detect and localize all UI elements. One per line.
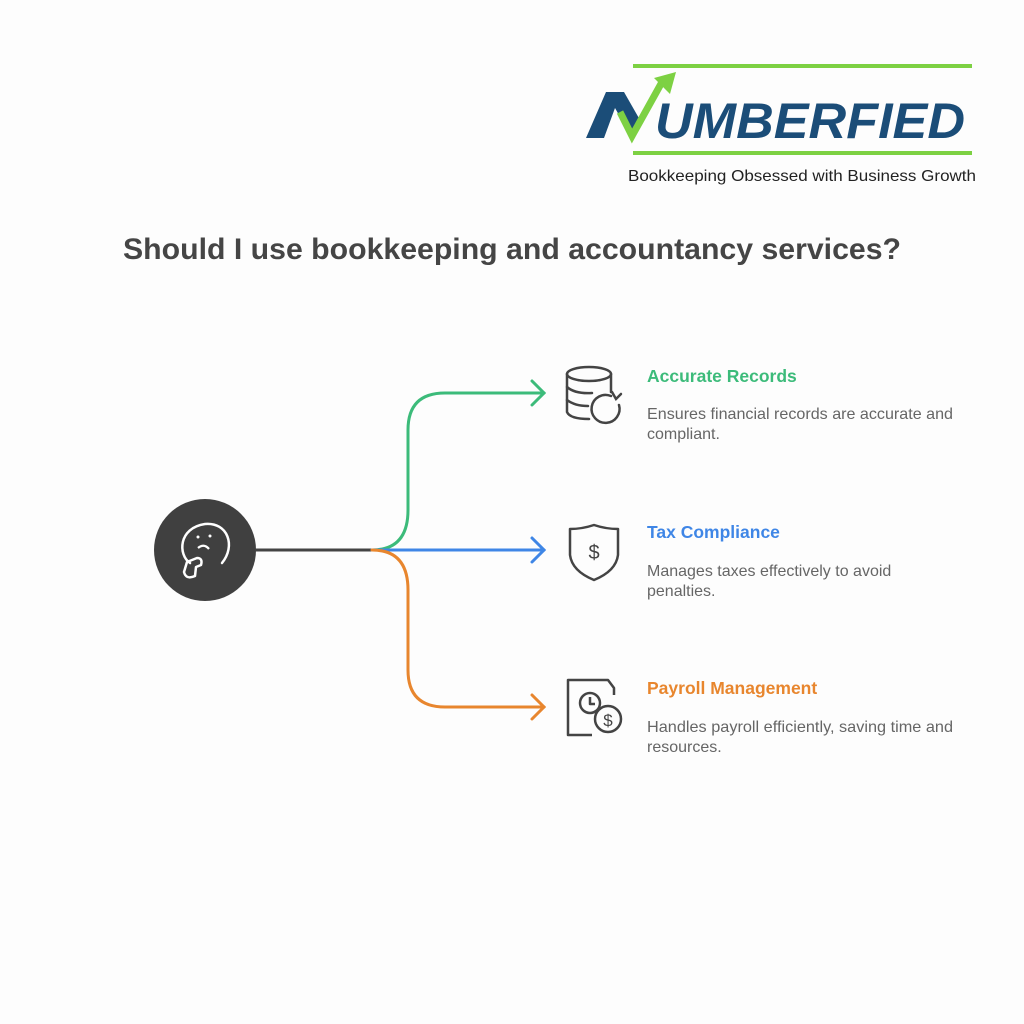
- text: payroll management: [647, 678, 953, 756]
- icon: document clock dollar: $: [603, 711, 613, 730]
- text: accurate records: compliant.: [647, 426, 720, 443]
- title: Should I use bookkeeping and accountancy services?: [123, 233, 901, 266]
- text: tax compliance: [647, 522, 891, 600]
- connector line: [255, 548, 372, 552]
- icon: shield dollar: $: [588, 542, 600, 564]
- arrow: blue: [372, 538, 544, 562]
- central thinking icon: [154, 499, 256, 601]
- text: accurate records: Accurate Records: [647, 366, 797, 386]
- icon: shield dollar: [570, 525, 618, 580]
- icon: database refresh: [567, 367, 621, 423]
- arrow: green: [372, 381, 544, 550]
- arrow: orange: [372, 550, 544, 719]
- text: payroll management: Payroll Management: [647, 678, 817, 698]
- text: accurate records: Ensures financial records are accurate and: [647, 406, 953, 423]
- logo: [586, 66, 976, 185]
- text: tax compliance: Tax Compliance: [647, 522, 780, 542]
- logo: Bookkeeping Obsessed with Business Growth: [628, 168, 976, 185]
- text: payroll management: Handles payroll efficiently, saving time and: [647, 719, 953, 736]
- text: payroll management: resources.: [647, 739, 722, 756]
- logo: UMBERFIED: [655, 93, 965, 149]
- text: tax compliance: penalties.: [647, 583, 716, 600]
- text: accurate records: [647, 366, 953, 443]
- icon: document clock dollar: [568, 680, 621, 735]
- text: tax compliance: Manages taxes effectively to avoid: [647, 563, 891, 580]
